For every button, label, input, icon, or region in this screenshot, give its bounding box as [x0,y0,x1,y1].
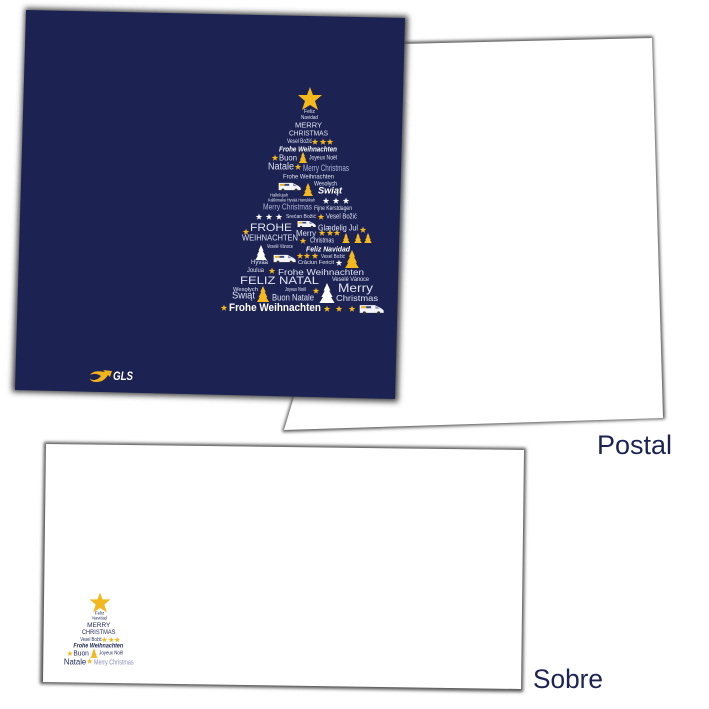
greetings in word rows: Fijne Kerstdagen [314,206,352,212]
greetings in word rows: Crăciun Fericit [298,260,334,266]
greetings in word rows: Feliz Navidad [306,244,350,254]
greetings in word rows: Frohe Weihnachten [229,302,321,314]
greetings in word rows: Swiąt [232,290,255,302]
greetings in word rows: Veselé Vánoce [332,277,370,283]
greetings in word rows: Buon Natale [272,292,314,304]
icon: top star [90,593,110,612]
greetings in word rows: Navidad [301,115,318,121]
greetings in word rows: Hallelujah [270,192,288,198]
greetings in word rows: Natale [64,656,86,666]
greetings in word rows: Glædelig Jul [318,224,358,232]
greetings in word rows: Vesel Božić [321,254,345,260]
greetings in word rows: Veselé Vánoce [267,244,293,250]
greetings in word rows: Frohe Weihnachten [283,174,334,180]
icon: top star [298,87,322,110]
panel: envelope [40,442,526,692]
greetings in word rows: Vesel Božić [287,139,312,145]
label: Postal: Postal [597,430,672,460]
greetings in word rows: Kalikimaka Hyvää Hanukkah [268,198,315,202]
greetings in word rows [64,611,134,667]
greetings in word rows: FELIZ NATAL [240,275,319,287]
greetings in word rows: MERRY [295,122,322,130]
greetings in word rows: Frohe Weihnachten [279,144,337,154]
greetings in word rows: MERRY [87,623,110,629]
greetings in word rows: Christmas [336,293,378,303]
greetings in word rows: Buon [73,649,89,658]
greetings in word rows: Wesołych [314,180,337,188]
delivery vans [274,183,384,315]
greetings in word rows: WEIHNACHTEN [242,234,298,242]
logo: GLS: GLS [113,371,133,383]
panel: navy card front [12,8,408,402]
greetings in word rows: FROHE [250,222,292,234]
greetings in word rows: Joyeux Noël [99,651,123,657]
white trees [255,245,335,303]
greetings in word rows: Frohe Weihnachten [278,267,364,277]
greetings in word rows: Merry Christmas [263,202,312,212]
greetings in word rows: Merry [296,228,317,238]
gold stars and tree [67,637,120,664]
christmas tree made of words [221,87,384,315]
greetings in word rows: Frohe Weihnachten [73,642,123,649]
greetings in word rows: CHRISTMAS [82,630,115,636]
panel: postal card back [282,36,665,432]
white stars [256,198,349,266]
greetings in word rows: Merry Christmas [303,163,349,173]
greetings in word rows: Feliz [95,611,105,617]
gold stars [221,139,366,312]
label: Sobre: Sobre [533,664,603,694]
greetings in word rows: Merry [338,281,373,295]
greetings in word rows: Vesel Božić [326,214,357,220]
greetings in word rows: Wesołych [233,287,258,293]
greetings in word rows [229,109,378,314]
greetings in word rows: Natale [268,162,294,172]
greetings in word rows: Hyvää [251,260,269,266]
small tree on envelope [64,593,134,667]
greetings in word rows: Merry Christmas [94,658,134,667]
greetings in word rows: Navidad [92,616,107,622]
greetings in word rows: Feliz [304,109,315,115]
greetings in word rows: Joyeux Noël [285,287,306,293]
greetings in word rows: Christmas [310,236,334,244]
greetings in word rows: Buon [279,152,297,162]
logo: GLS [90,370,133,383]
greetings in word rows: Joulua [247,268,265,274]
greetings in word rows: Vesel Božić [80,637,102,643]
greetings in word rows: Srećan Božić [286,214,316,220]
greetings in word rows: CHRISTMAS [289,130,328,138]
gold trees [257,152,372,302]
greetings in word rows: Joyeux Noël [309,154,337,162]
greetings in word rows: Swiąt [318,186,343,196]
